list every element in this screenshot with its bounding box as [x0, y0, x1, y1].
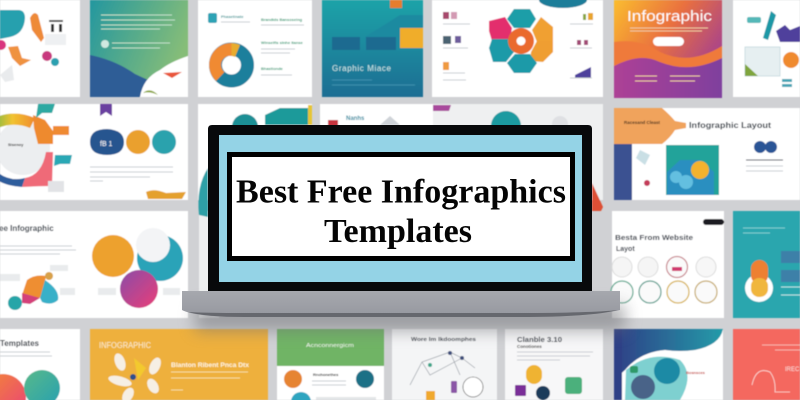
laptop bezel [208, 125, 592, 291]
panel: orange infographic template: Blanton Ribent Pnca Dtx [171, 362, 249, 369]
laptop base [182, 291, 620, 317]
base lower edge [188, 310, 618, 317]
panel: donut chart template: Phasetinate [221, 14, 244, 19]
laptop screen [219, 135, 582, 282]
panel: orange infographic template: INFOGRAPHIC [99, 341, 151, 350]
panel: orange infographic template [90, 329, 268, 400]
panel: website layout template: Besta From Website [615, 233, 693, 242]
panel: map template [0, 0, 80, 97]
panel: free infographic circles template [0, 211, 188, 318]
panel: rainbow ring template: fB 1 [100, 141, 113, 148]
panel: network template: Wore Im Ikdoomphes [411, 337, 476, 343]
laptop [182, 125, 620, 317]
panel: website layout template: Layot [616, 246, 635, 253]
panel: teal pill template [733, 211, 800, 318]
panel: nanhs template [320, 104, 433, 200]
panel: graphic teal template [322, 0, 423, 97]
panel: infographic layout template: Infographic Layout [689, 121, 771, 130]
panel: infographic layout template [614, 108, 800, 200]
panel: rainbow ring template: Sisenoy [8, 142, 24, 147]
panel: blue teal blobs template: Bosnsces [686, 370, 706, 375]
panel: donut chart template: Bhastionde [261, 66, 284, 71]
panel: templates bottom left: Templates [0, 339, 40, 348]
panel: templates bottom left [0, 329, 80, 400]
title: Best Free Infographics [236, 174, 566, 210]
panel: website layout template [611, 211, 724, 318]
panel: green header template: Acnconnergicm [306, 343, 355, 349]
panel: teal green gradient template [90, 0, 188, 97]
subtitle: Templates [324, 213, 472, 250]
panel: donut chart template [198, 0, 312, 97]
panel: orange purple infographic template [614, 0, 722, 98]
panel: green header template: Rnchonethes [313, 372, 339, 377]
panel: checklist template [505, 329, 603, 400]
panel: network template [392, 329, 497, 400]
panel: orange purple infographic template: Infographic [627, 8, 713, 25]
panel: teal purple shapes template [733, 0, 800, 97]
panel: nanhs template: Nanhs [346, 116, 365, 122]
laptop shadow [195, 305, 625, 331]
panel: partly hidden template left [198, 104, 312, 200]
panel: checklist template: Clanble 3.10 [517, 337, 562, 344]
icon: teal blob behind laptop [198, 168, 208, 217]
panel: coral template: IREC [785, 367, 800, 373]
panel: checklist template: Conotiones [517, 344, 542, 349]
panel: green header template [277, 329, 384, 400]
panel: blue teal blobs template [614, 329, 723, 400]
chart: donut [209, 43, 248, 81]
panel: graphic teal template: Graphic Miace [332, 64, 392, 73]
title box [230, 154, 572, 258]
panel: donut chart template: Winselfls slnhe itanse [261, 40, 304, 45]
panel: coral template [733, 329, 800, 400]
icon: red shape behind laptop [592, 183, 603, 211]
panel: partly hidden template right [433, 104, 603, 200]
icon: hexagon cluster [489, 9, 553, 73]
panel: infographic layout template: Racesand Cleast [624, 120, 661, 125]
panel: free infographic circles template: ee Infographic [0, 224, 54, 233]
panel: hexagon flower template [432, 0, 603, 97]
icon: white petal figure [107, 352, 163, 400]
panel: hidden template strip [199, 211, 219, 318]
panel: donut chart template: Brandids Bansoseing [261, 17, 303, 22]
panel: rainbow ring template [0, 104, 188, 200]
